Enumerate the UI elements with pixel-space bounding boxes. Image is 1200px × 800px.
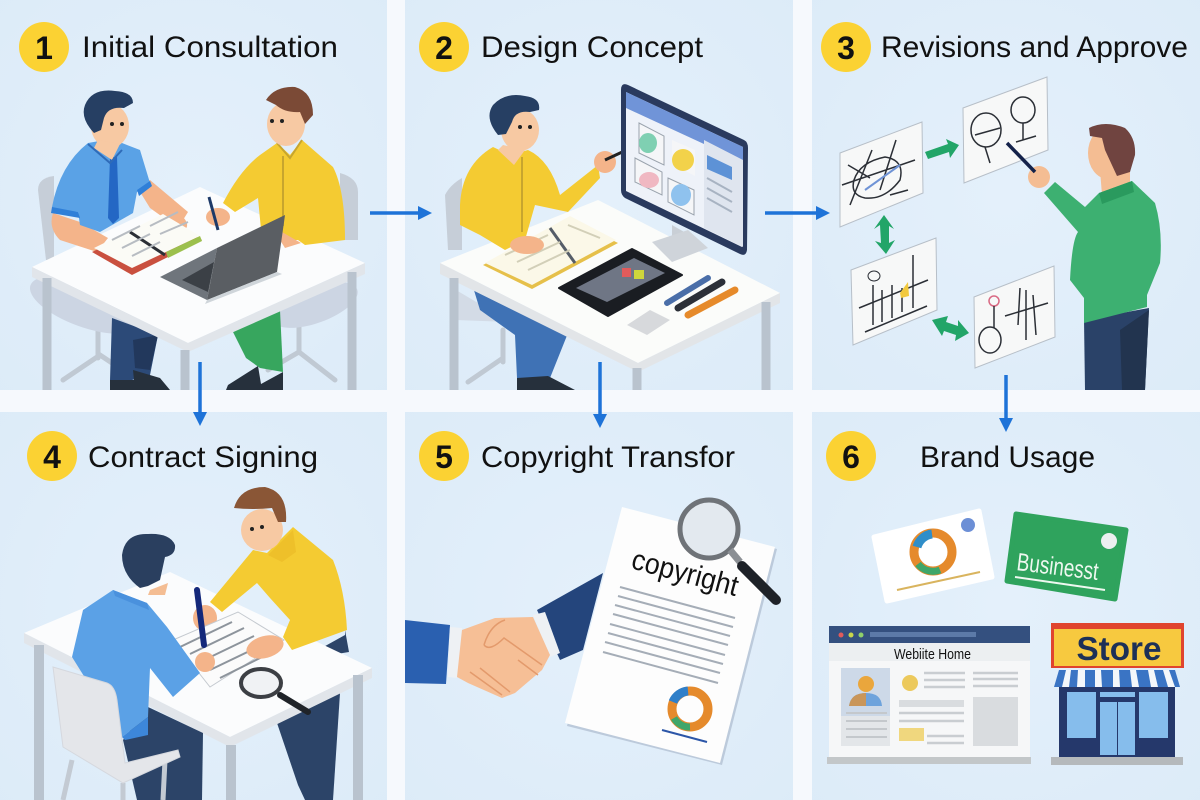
- contract paper: [173, 612, 284, 687]
- magnifying glass: [241, 669, 308, 712]
- sketch 3: [851, 238, 937, 345]
- arrow: step 2 to step 5: [593, 362, 607, 428]
- heading: step 5: Copyright Transfor: [481, 441, 735, 474]
- heading: step 6: Brand Usage: [920, 441, 1095, 474]
- panel: brand usage: [812, 412, 1200, 800]
- notebook: [92, 212, 202, 275]
- sketch 2: [963, 77, 1048, 183]
- right man: [206, 87, 345, 248]
- tablet: [559, 249, 682, 316]
- arrow: step 2 to step 3: [765, 206, 830, 220]
- notebook: [483, 216, 618, 289]
- illustration: handshake and copyright document: [405, 500, 777, 765]
- panel: copyright transfer: [405, 412, 793, 800]
- white business card: [874, 511, 992, 601]
- step 5 badge: [419, 431, 469, 481]
- arrow: step 1 to step 4: [193, 362, 207, 426]
- arrow: step 1 to step 2: [370, 206, 432, 220]
- illustration: designer at a monitor: [440, 84, 780, 390]
- panel: initial consultation: [0, 0, 387, 390]
- man in yellow: [193, 487, 347, 650]
- step 4 badge: 4: [43, 439, 61, 475]
- step 4 badge: [27, 431, 77, 481]
- arrow: step 3 to step 6: [999, 375, 1013, 432]
- monitor: [621, 84, 748, 262]
- website mockup: [827, 626, 1031, 764]
- storefront: Store: [1076, 630, 1162, 667]
- step 6 badge: 6: [842, 439, 860, 475]
- chair: [53, 667, 180, 800]
- handshake: [405, 573, 603, 698]
- illustration: sketches on a wall with reviewer: [840, 77, 1161, 390]
- step 2 badge: [419, 22, 469, 72]
- website mockup: Webiite Home: [894, 646, 971, 663]
- document: [565, 507, 777, 765]
- reviewer in green: [1007, 124, 1161, 390]
- designer: [460, 95, 633, 250]
- step 6 badge: [826, 431, 876, 481]
- storefront: [1051, 623, 1184, 765]
- eraser: [627, 310, 670, 335]
- left man: [51, 91, 190, 252]
- sketch 1: [840, 122, 923, 227]
- sketch 4: [974, 266, 1055, 368]
- panel: revisions and approve: [812, 0, 1200, 390]
- heading: step 2: Design Concept: [481, 31, 704, 64]
- step 3 badge: [821, 22, 871, 72]
- step 5 badge: 5: [435, 439, 453, 475]
- step 1 badge: 1: [35, 30, 53, 66]
- document: copyright: [628, 544, 742, 603]
- heading: step 4: Contract Signing: [88, 441, 318, 474]
- illustration: two people at a desk: [23, 87, 365, 390]
- panel: contract signing: [0, 412, 387, 800]
- heading: step 1: Initial Consultation: [82, 31, 338, 64]
- step 2 badge: 2: [435, 30, 453, 66]
- illustration: signing a contract: [24, 487, 372, 800]
- magnifying glass: [680, 500, 776, 600]
- step 1 badge: [19, 22, 69, 72]
- panel: design concept: [405, 0, 793, 390]
- step 3 badge: 3: [837, 30, 855, 66]
- man in blue: [72, 534, 215, 800]
- green business card: Businesst: [1015, 548, 1100, 586]
- green business card: [1007, 514, 1126, 599]
- yellow man's hand: [244, 631, 286, 663]
- pen: [197, 590, 204, 645]
- green arrows between sketches: [874, 139, 969, 341]
- heading: step 3: Revisions and Approve: [881, 31, 1188, 64]
- pens: [667, 278, 735, 315]
- laptop: [160, 215, 285, 304]
